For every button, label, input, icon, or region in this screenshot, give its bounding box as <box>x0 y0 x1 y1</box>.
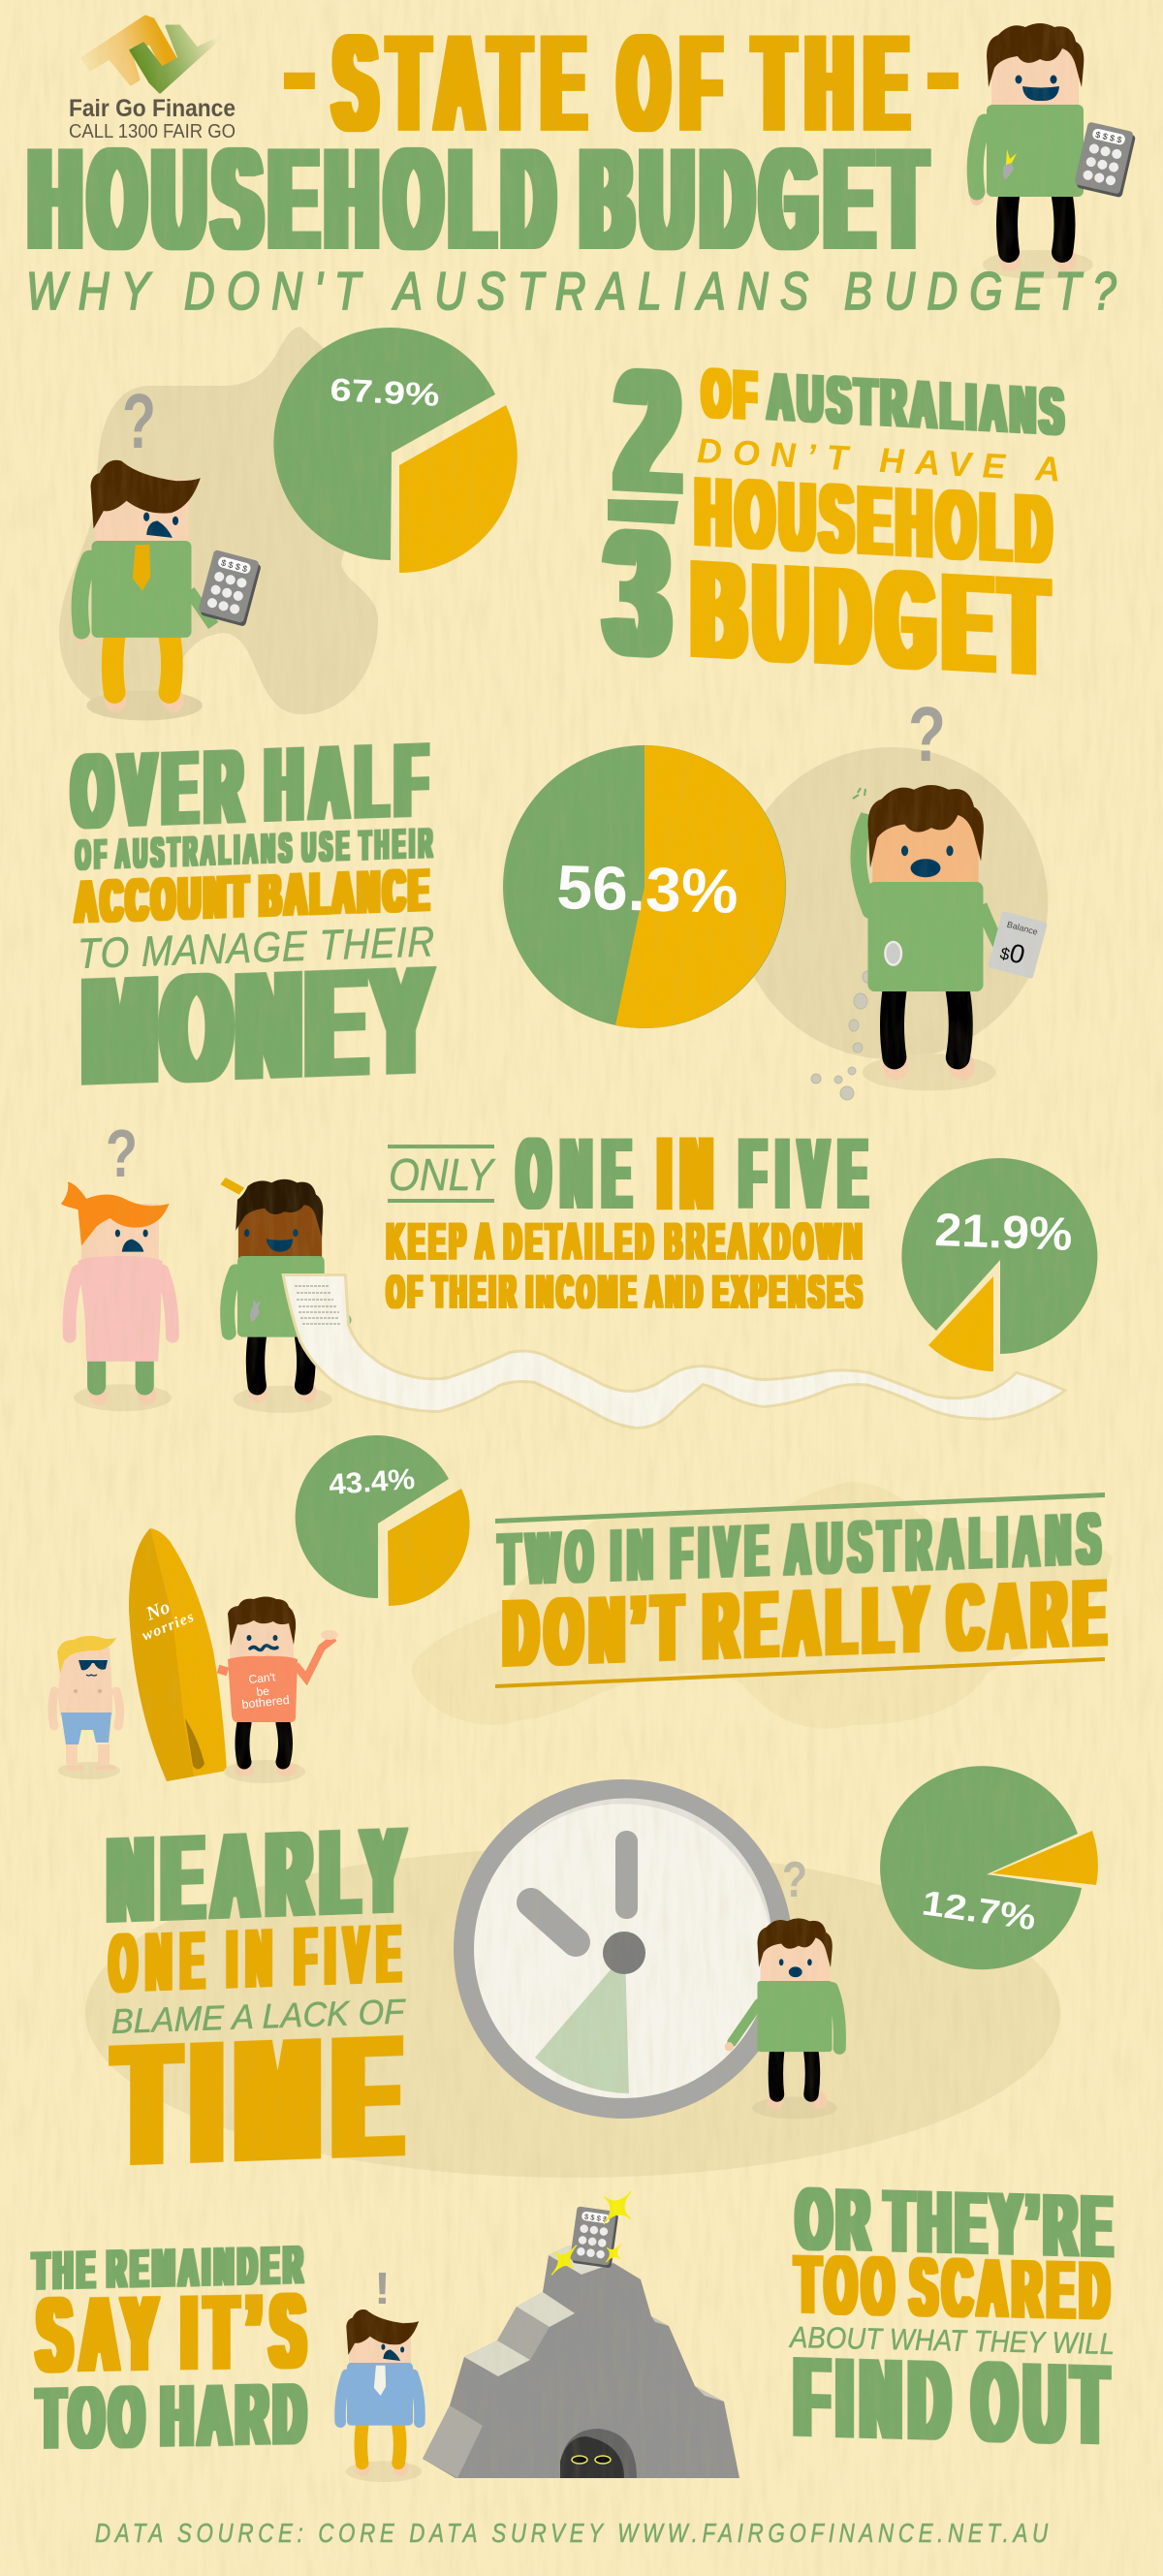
heading: too scared: TOO SCARED <box>796 2240 1109 2338</box>
background circle <box>736 747 1048 1059</box>
background ellipse <box>85 1848 1060 2178</box>
falling coins <box>811 971 872 1100</box>
logo name: Fair Go Finance <box>69 95 236 122</box>
panel: blame lack of time <box>85 1766 1098 2202</box>
character: can't be bothered man <box>218 1597 338 1783</box>
question mark: ? <box>106 1115 138 1191</box>
question mark: ? <box>782 1852 807 1908</box>
fraction bar <box>608 499 678 524</box>
panel: header <box>26 0 1137 321</box>
character: blond surfer <box>52 1636 120 1779</box>
icon: calculator on peak: $$$$ <box>583 2214 608 2225</box>
heading: two in five Australians: TWO IN FIVE AUSTRALIANS <box>499 1499 1100 1601</box>
icon: clock <box>454 1779 793 2119</box>
heading: one in five: ONE IN FIVE <box>518 1117 866 1229</box>
heading: budget: BUDGET <box>693 532 1046 705</box>
heading: household: HOUSEHOLD <box>696 456 1051 584</box>
cave with eyes <box>560 2429 637 2478</box>
icon: calculator <box>1074 121 1137 198</box>
character: can't be bothered man: be <box>256 1684 270 1699</box>
icon: calculator: $$$$ <box>1094 131 1123 146</box>
mountain <box>423 2246 739 2478</box>
surfboard: worries <box>140 1609 196 1645</box>
heading: to manage their: TO MANAGE THEIR <box>78 918 434 978</box>
background blob <box>412 1482 1113 1729</box>
heading: account balance: ACCOUNT BALANCE <box>76 858 428 936</box>
pie chart: 12.7% <box>880 1766 1098 1969</box>
divider top <box>495 1492 1105 1524</box>
heading: of their income and expenses: OF THEIR INCOME AND EXPENSES <box>387 1266 862 1317</box>
character: man in blue shirt <box>340 2309 423 2482</box>
icon: calculator: $$$$ <box>220 558 249 575</box>
heading: one in five: ONE IN FIVE <box>110 1907 400 2009</box>
heading: or they're: OR THEY’RE <box>797 2170 1112 2277</box>
footer: data source: DATA SOURCE: CORE DATA SURVEY WWW.FAIRGOFINANCE.NET.AU <box>95 2519 1049 2549</box>
panel: two in five don't care <box>52 1435 1113 1783</box>
heading: the remainder: THE REMAINDER <box>33 2237 302 2302</box>
balance card: $0 <box>997 935 1028 970</box>
icon: calculator on peak <box>570 2206 619 2268</box>
heading: of Australians use their: OF AUSTRALIANS USE THEIR <box>76 821 432 879</box>
pie chart: 56.3% <box>503 745 786 1028</box>
panel: only one in five <box>61 1115 1097 1427</box>
heading: money: MONEY <box>84 935 429 1118</box>
fraction: numerator: 2 <box>618 331 677 531</box>
divider bottom <box>495 1657 1105 1688</box>
character: dark-haired woman with pencil <box>220 1178 345 1413</box>
logo <box>69 16 236 142</box>
panel: over half use account balance <box>73 691 1048 1118</box>
heading: only: ONLY <box>389 1149 496 1200</box>
panel: too hard or too scared <box>33 2170 1115 2482</box>
heading: don't have a: DON’T HAVE A <box>697 430 1060 489</box>
character: worried man with calculator <box>75 460 213 720</box>
pie label: 56.3% <box>556 852 739 927</box>
heading: time: TIME <box>117 1998 399 2202</box>
heading: over half: OVER HALF <box>73 720 426 850</box>
icon: calculator <box>198 550 263 627</box>
character: can't be bothered man: bothered <box>241 1693 290 1712</box>
icon: scratch marks <box>853 788 865 799</box>
surfboard <box>129 1528 227 1781</box>
question mark: ? <box>122 378 156 464</box>
heading: about what they will: ABOUT WHAT THEY WILL <box>788 2320 1115 2361</box>
heading: too hard: TOO HARD <box>38 2365 305 2466</box>
fraction: denominator: 3 <box>608 492 667 695</box>
pie label: 12.7% <box>920 1882 1038 1937</box>
pie chart: 21.9% <box>901 1158 1097 1371</box>
pie label: 43.4% <box>328 1463 416 1501</box>
heading: nearly: NEARLY <box>109 1803 403 1948</box>
logo phone: CALL 1300 FAIR GO <box>69 121 236 142</box>
exclamation mark: ! <box>374 2263 391 2313</box>
paper roll <box>285 1276 1062 1427</box>
balance card: Balance <box>1006 920 1039 937</box>
sparkles <box>542 2181 644 2283</box>
heading: don't really care: DON’T REALLY CARE <box>504 1561 1105 1687</box>
balance card <box>988 911 1048 979</box>
character: happy man with calculator <box>970 23 1093 279</box>
title line 1: STATE OF THE <box>334 8 907 160</box>
character: can't be bothered man: Can't <box>248 1670 276 1686</box>
question mark: ? <box>908 691 946 777</box>
heading: find out: FIND OUT <box>795 2335 1107 2468</box>
heading: keep a detailed breakdown: KEEP A DETAILED BREAKDOWN <box>387 1211 862 1270</box>
character: woman in pink dress <box>61 1181 173 1411</box>
pie label: 21.9% <box>934 1205 1073 1261</box>
character: man by clock <box>725 1918 839 2119</box>
panel: two in three have no budget <box>59 327 1063 720</box>
pie chart: 67.9% <box>273 328 518 573</box>
heading: say it's: SAY IT’S <box>38 2273 304 2395</box>
pie chart: 43.4% <box>296 1435 470 1606</box>
heading: of Australians: OF AUSTRALIANS <box>703 355 1063 450</box>
pie label: 67.9% <box>330 371 440 413</box>
subtitle: WHY DON'T AUSTRALIANS BUDGET? <box>26 261 1116 321</box>
background blob <box>59 327 388 714</box>
logo mark <box>82 16 221 92</box>
heading: blame a lack of: BLAME A LACK OF <box>111 1993 406 2041</box>
title line 2: HOUSEHOLD BUDGET <box>30 118 925 279</box>
surfboard: No <box>142 1596 173 1625</box>
character: broke man scratching head <box>859 785 1009 1090</box>
